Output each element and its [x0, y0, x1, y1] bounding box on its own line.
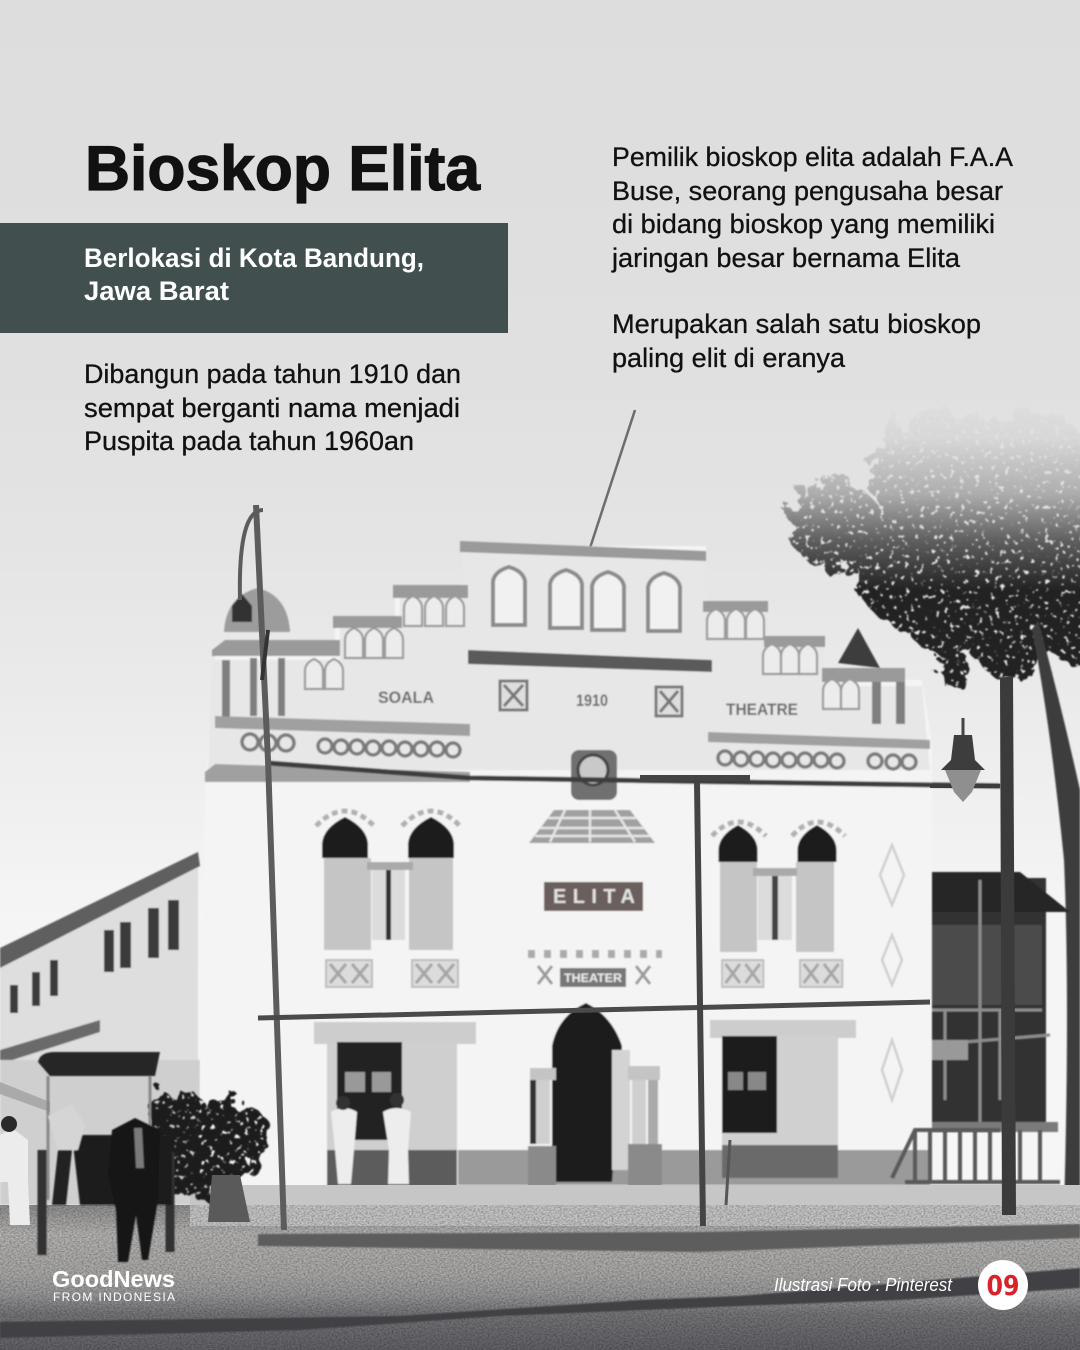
aerial mast [590, 410, 635, 548]
left lamp post [240, 505, 284, 1230]
window grilles [326, 960, 842, 987]
text block: history: sempat berganti nama menjadi [84, 393, 460, 423]
two men standing [331, 1093, 411, 1184]
wooden fence [892, 1130, 1060, 1182]
mid cornice of central bay [468, 650, 712, 672]
tram poles and beam [258, 778, 1000, 1226]
right wooden shed [928, 872, 1070, 1132]
overhead cables and tram beam [268, 763, 1000, 786]
text block: history: Puspita pada tahun 1960an [84, 426, 414, 456]
tree canopy [790, 410, 1080, 688]
page number badge [978, 1260, 1028, 1310]
cinema building [200, 541, 1000, 1186]
photo: Elita cinema street scene [0, 410, 1080, 1350]
tree trunk [1032, 620, 1080, 1210]
logo: GoodNews from Indonesia: GoodNews [52, 1266, 175, 1292]
stepped parapet cornices [212, 541, 905, 682]
road rut left [0, 1268, 1080, 1338]
carriage body [72, 1135, 172, 1205]
left shop opening [314, 1022, 476, 1186]
right upper windows [712, 822, 845, 952]
street lamp [941, 718, 985, 802]
facade lettering [378, 688, 798, 719]
frieze rings [242, 734, 916, 769]
left neighbouring building [0, 852, 200, 1205]
lantern finial [232, 594, 252, 622]
text block: significance: Merupakan salah satu bioskop [612, 309, 981, 339]
base plinth [458, 1150, 930, 1185]
text block: owner: Buse, seorang pengusaha besar [612, 176, 1003, 206]
horse [108, 1118, 160, 1262]
clock [571, 750, 617, 800]
text block: history: Dibangun pada tahun 1910 dan [84, 359, 461, 389]
person in white at left [0, 1116, 30, 1225]
potted palms [139, 1090, 268, 1201]
upper arched windows [493, 567, 680, 631]
tower details [222, 658, 905, 724]
facade silhouette [200, 546, 932, 1185]
left shed awning [0, 1082, 50, 1112]
frieze bands [205, 716, 930, 782]
text block: significance [612, 309, 981, 373]
horse carriage [38, 1052, 172, 1262]
horse blaze [134, 1128, 144, 1168]
grilles in central bay [500, 681, 682, 716]
facade lettering: THEATRE [726, 700, 798, 719]
banner: location [0, 223, 508, 333]
title: Bioskop Elita [85, 134, 481, 204]
photo credit: Ilustrasi Foto : Pinterest [774, 1275, 953, 1295]
carriage canopy [38, 1052, 160, 1076]
wheels [42, 1150, 170, 1255]
diamond wall ornaments [880, 845, 904, 1100]
central ornament with small sign: THEATER [564, 971, 622, 985]
road [0, 1185, 1080, 1350]
text block: owner: di bidang bioskop yang memiliki [612, 209, 995, 239]
text block: owner [611, 142, 1013, 273]
facade lettering: 1910 [576, 691, 608, 710]
roof tile behind right tower [838, 628, 880, 668]
text block: history [84, 359, 461, 456]
logo: GoodNews from Indonesia [52, 1266, 175, 1304]
upper facade shading [208, 552, 930, 770]
base of palms [208, 1175, 250, 1222]
central ornament with small sign [528, 954, 662, 987]
banner: location: Jawa Barat [84, 276, 229, 306]
tiled gable [529, 810, 655, 843]
facade lettering: SOALA [378, 688, 434, 707]
logo: GoodNews from Indonesia: FROM INDONESIA [53, 1290, 175, 1304]
left upper windows [316, 811, 460, 950]
banner: location: Berlokasi di Kota Bandung, [84, 243, 424, 273]
ELITA sign: ELITA [553, 886, 635, 908]
text block: significance: paling elit di eranya [612, 343, 846, 373]
small parapet arches [305, 596, 859, 709]
ELITA sign [544, 882, 643, 911]
right pole [1000, 676, 1016, 1215]
text block: owner: Pemilik bioskop elita adalah F.A.A [612, 142, 1013, 172]
page number badge: 09 [986, 1269, 1020, 1302]
road kerb dark strip [258, 1224, 1080, 1252]
right shop opening [710, 1020, 856, 1178]
driver and passenger [48, 1104, 85, 1152]
central doorway [528, 1003, 662, 1186]
dome [224, 588, 290, 632]
text block: owner: jaringan besar bernama Elita [611, 243, 961, 273]
